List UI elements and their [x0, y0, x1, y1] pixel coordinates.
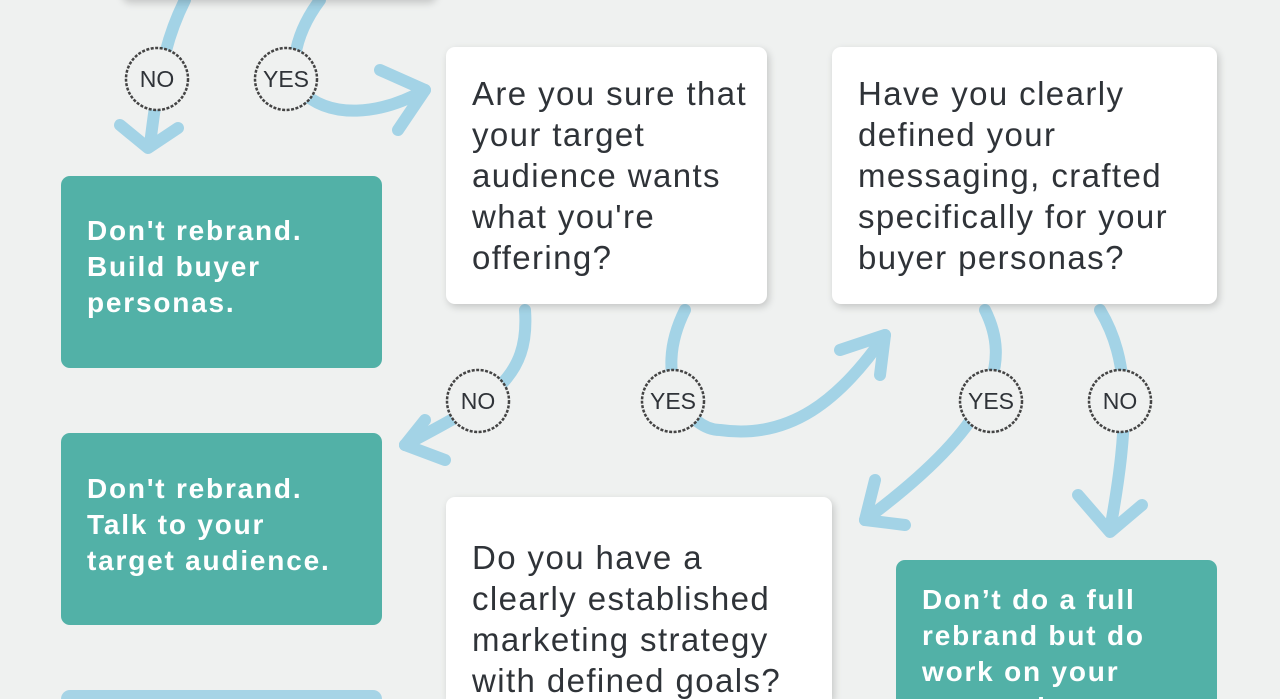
outcome: build buyer personas: personas. — [87, 287, 235, 318]
circle YES 1: YES — [263, 66, 309, 92]
outcome: talk to audience: Talk to your — [87, 509, 265, 540]
circle NO 2: NO — [461, 388, 495, 414]
question 2: defined your — [858, 116, 1056, 153]
question 1: what you're — [472, 198, 655, 235]
question 1: audience wants — [472, 157, 721, 194]
arrow: Q2 no — [1078, 310, 1142, 532]
question 3: marketing strategy — [472, 621, 769, 658]
arrow: Q1 yes — [671, 310, 885, 432]
question 3: with defined goals? — [472, 662, 781, 699]
outcome: build buyer personas: Build buyer — [87, 251, 261, 282]
outcome: talk to audience — [61, 433, 382, 625]
outcome: partial rebrand: work on your — [922, 656, 1119, 687]
circle YES 3: YES — [968, 388, 1014, 414]
circle NO 2 — [447, 370, 509, 432]
question 1 — [446, 47, 767, 304]
question 1: Are you sure that — [472, 75, 747, 112]
question 1: offering? — [472, 239, 612, 276]
outcome: partial rebrand — [896, 560, 1217, 699]
circle YES 3 — [960, 370, 1022, 432]
outcome: build buyer personas — [61, 176, 382, 368]
circle YES 2 — [642, 370, 704, 432]
arrow: yes to Q1 — [294, 0, 425, 130]
question 2: Have you clearly — [858, 75, 1124, 112]
circle NO 3 — [1089, 370, 1151, 432]
arrow: Q2 yes — [865, 310, 996, 525]
circle YES 1 — [255, 48, 317, 110]
outcome: talk to audience: target audience. — [87, 545, 331, 576]
question 2: messaging, crafted — [858, 157, 1162, 194]
circle NO 1: NO — [140, 66, 174, 92]
question 1: your target — [472, 116, 645, 153]
outcome: partial rebrand: rebrand but do — [922, 620, 1145, 651]
arrow: no to box 1 — [120, 0, 185, 148]
circle YES 2: YES — [650, 388, 696, 414]
question 2 — [832, 47, 1217, 304]
question 2: buyer personas? — [858, 239, 1125, 276]
arrow: Q1 no — [405, 310, 525, 460]
outcome: talk to audience: Don't rebrand. — [87, 473, 302, 504]
question 3 — [446, 497, 832, 699]
question 3: Do you have a — [472, 539, 703, 576]
circle NO 1 — [126, 48, 188, 110]
question 3: clearly established — [472, 580, 770, 617]
outcome: partial rebrand: Don’t do a full — [922, 584, 1136, 615]
outcome: light blue box — [61, 690, 382, 699]
circle NO 3: NO — [1103, 388, 1137, 414]
question 2: specifically for your — [858, 198, 1168, 235]
outcome: build buyer personas: Don't rebrand. — [87, 215, 302, 246]
